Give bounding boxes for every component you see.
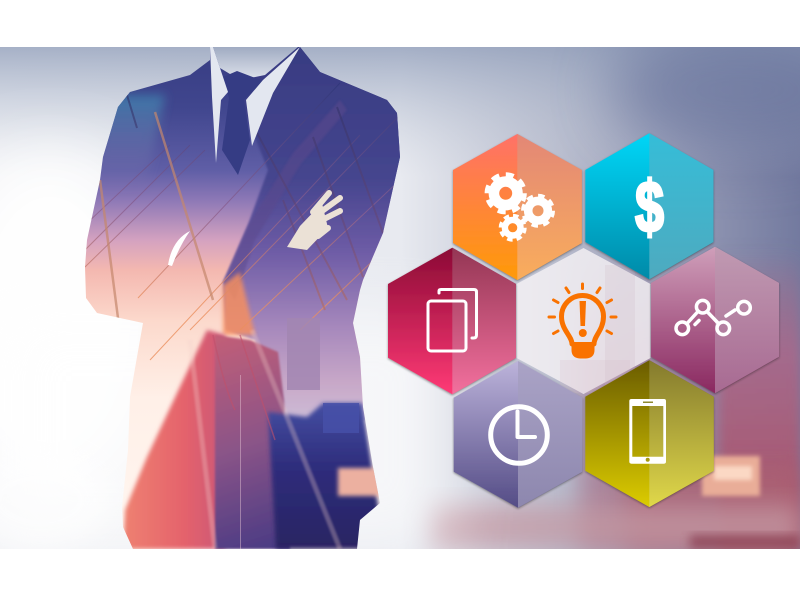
- hexagon: smartphone: [585, 360, 714, 507]
- shirt collars: [210, 47, 228, 163]
- icon: lightbulb: [549, 284, 616, 358]
- icon: clock: [491, 407, 547, 463]
- tie: [222, 71, 254, 175]
- icon: gears: [487, 175, 553, 240]
- icon: smartphone: [629, 399, 666, 464]
- hexagon: line chart: [651, 247, 779, 393]
- icon: documents: [428, 290, 476, 351]
- hand: [287, 193, 340, 250]
- hexagon: documents: [388, 248, 516, 394]
- icon: line chart: [676, 300, 750, 335]
- pocket square: [168, 231, 190, 266]
- hexagon: clock: [454, 361, 582, 508]
- lower red and blue coat: [123, 330, 232, 549]
- neck and shirt: [213, 47, 298, 80]
- window lines: [85, 83, 400, 360]
- center hexagon with lightbulb: [516, 248, 650, 394]
- reflected building: [223, 100, 347, 300]
- hexagon: dollar: [585, 133, 713, 279]
- icon: dollar sign: $: [635, 167, 664, 248]
- businessman silhouette: [80, 47, 410, 549]
- hexagon: gears: [453, 134, 582, 280]
